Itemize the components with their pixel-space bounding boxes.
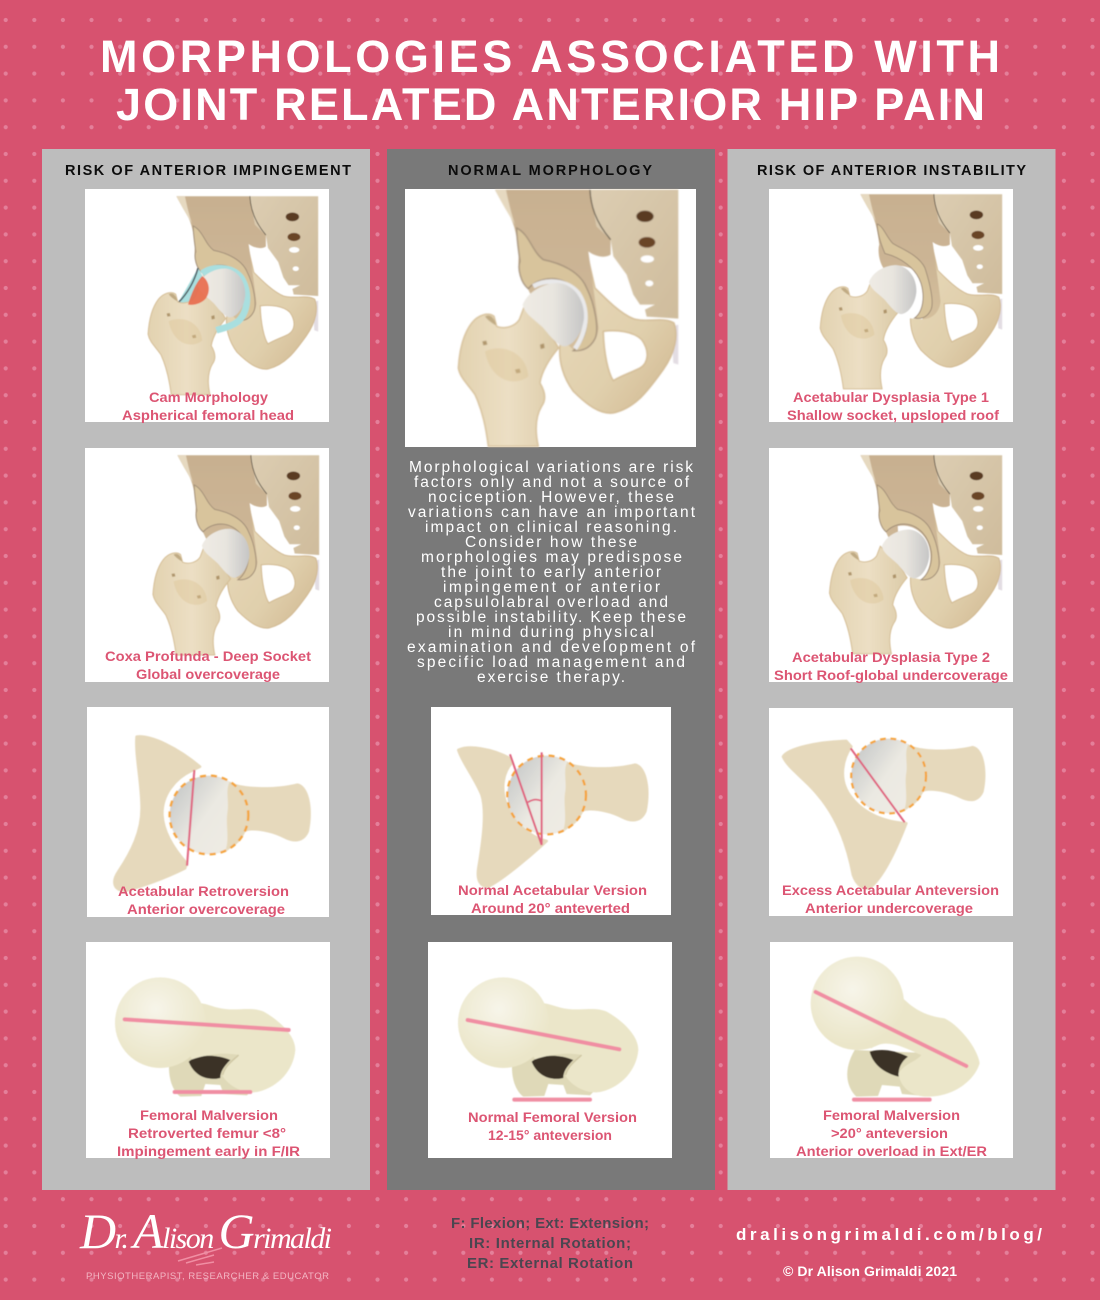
logo: Dr Alison Grimaldi signature: Dr. Alison Grimaldi	[79, 1203, 332, 1259]
caption: acetabular dysplasia type 2	[774, 650, 1009, 683]
text block: explanation: impact on clinical reasoning.	[425, 519, 677, 536]
heading: risk of anterior instability: RISK OF ANTERIOR INSTABILITY	[757, 163, 1026, 179]
caption: excess acetabular anteversion	[782, 883, 999, 916]
caption: excess acetabular anteversion: Anterior undercoverage	[805, 901, 974, 916]
card: acetabular dysplasia type 1	[769, 189, 1013, 423]
caption: coxa profunda	[105, 649, 312, 682]
card: acetabular dysplasia type 2	[769, 448, 1013, 683]
caption: normal acetabular version	[458, 883, 647, 916]
caption: normal acetabular version: Normal Acetabular Version	[458, 883, 647, 898]
website and copyright	[736, 1225, 1042, 1279]
title: JOINT RELATED ANTERIOR HIP PAIN	[116, 79, 985, 130]
text block: explanation: impingement or anterior	[443, 579, 660, 596]
caption: femoral malversion anteverted: Anterior overload in Ext/ER	[796, 1144, 987, 1159]
caption: normal femoral version: Normal Femoral Version	[468, 1110, 637, 1125]
card: normal acetabular version	[431, 707, 671, 916]
heading: risk of anterior impingement: RISK OF ANTERIOR IMPINGEMENT	[65, 163, 351, 179]
card: excess acetabular anteversion	[769, 708, 1013, 916]
abbreviations legend: ER: External Rotation	[467, 1255, 633, 1272]
text block: explanation: nociception. However, these	[428, 489, 674, 506]
title	[100, 31, 1000, 130]
card: femoral malversion retroverted	[86, 942, 330, 1159]
text block: explanation: exercise therapy.	[477, 669, 625, 686]
caption: femoral malversion retroverted	[117, 1108, 300, 1159]
caption: acetabular dysplasia type 1	[787, 390, 1000, 423]
caption: acetabular dysplasia type 2: Short Roof-global undercoverage	[774, 668, 1009, 683]
caption: femoral malversion retroverted: Femoral Malversion	[140, 1108, 278, 1123]
title: MORPHOLOGIES ASSOCIATED WITH	[100, 31, 1000, 82]
heading: normal morphology: NORMAL MORPHOLOGY	[448, 163, 652, 179]
website and copyright: © Dr Alison Grimaldi 2021	[783, 1263, 957, 1279]
text block: explanation: factors only and not a source of	[414, 474, 690, 491]
text block: explanation: examination and development of	[407, 639, 696, 656]
caption: normal acetabular version: Around 20° anteverted	[471, 901, 630, 916]
caption: femoral malversion anteverted: Femoral Malversion	[823, 1108, 960, 1123]
panel: risk of anterior instability	[728, 149, 1056, 1190]
caption: femoral malversion anteverted: >20° anteversion	[831, 1126, 948, 1141]
caption: acetabular retroversion: Anterior overcoverage	[127, 902, 286, 917]
text block: explanation: Consider how these	[465, 534, 637, 551]
text block: explanation: capsulolabral overload and	[434, 594, 668, 611]
abbreviations legend	[451, 1215, 649, 1272]
caption: cam morphology: Cam Morphology	[149, 390, 269, 405]
abbreviations legend: F: Flexion; Ext: Extension;	[451, 1215, 649, 1232]
text block: explanation: in mind during physical	[448, 624, 654, 641]
caption: normal femoral version	[468, 1110, 637, 1143]
caption: cam morphology	[122, 390, 294, 423]
card: cam morphology	[85, 189, 329, 423]
text block: explanation: morphologies may predispose	[421, 549, 682, 566]
text block: explanation: possible instability. Keep these	[416, 609, 686, 626]
card: coxa profunda	[85, 448, 329, 682]
panel: risk of anterior impingement	[42, 149, 370, 1190]
text block: explanation: specific load management and	[417, 654, 685, 671]
caption: femoral malversion anteverted	[796, 1108, 987, 1159]
text block: explanation	[407, 459, 696, 686]
text block: explanation: the joint to early anterior	[441, 564, 661, 581]
caption: acetabular retroversion	[118, 884, 289, 917]
caption: femoral malversion retroverted: Impingement early in F/IR	[117, 1144, 300, 1159]
caption: cam morphology: Aspherical femoral head	[122, 408, 294, 423]
caption: acetabular retroversion: Acetabular Retroversion	[118, 884, 289, 899]
text block: explanation: variations can have an important	[408, 504, 696, 521]
card: normal hip	[405, 189, 696, 447]
caption: coxa profunda: Global overcoverage	[136, 667, 281, 682]
card: femoral malversion anteverted	[770, 942, 1013, 1159]
caption: acetabular dysplasia type 1: Shallow socket, upsloped roof	[787, 408, 1000, 423]
card: normal femoral version	[428, 942, 672, 1158]
logo: Dr Alison Grimaldi signature: PHYSIOTHERAPIST, RESEARCHER & EDUCATOR	[86, 1271, 329, 1282]
text block: explanation: Morphological variations are risk	[409, 459, 693, 476]
caption: femoral malversion retroverted: Retroverted femur <8°	[128, 1126, 286, 1141]
caption: coxa profunda: Coxa Profunda - Deep Socket	[105, 649, 312, 664]
card: acetabular retroversion	[87, 707, 329, 917]
panel: normal morphology	[387, 149, 715, 1190]
caption: acetabular dysplasia type 2: Acetabular Dysplasia Type 2	[792, 650, 990, 665]
abbreviations legend: IR: Internal Rotation;	[469, 1235, 631, 1252]
website and copyright: dralisongrimaldi.com/blog/	[736, 1225, 1042, 1244]
caption: excess acetabular anteversion: Excess Acetabular Anteversion	[782, 883, 999, 898]
caption: acetabular dysplasia type 1: Acetabular Dysplasia Type 1	[793, 390, 990, 405]
caption: normal femoral version: 12-15° anteversion	[488, 1128, 612, 1143]
